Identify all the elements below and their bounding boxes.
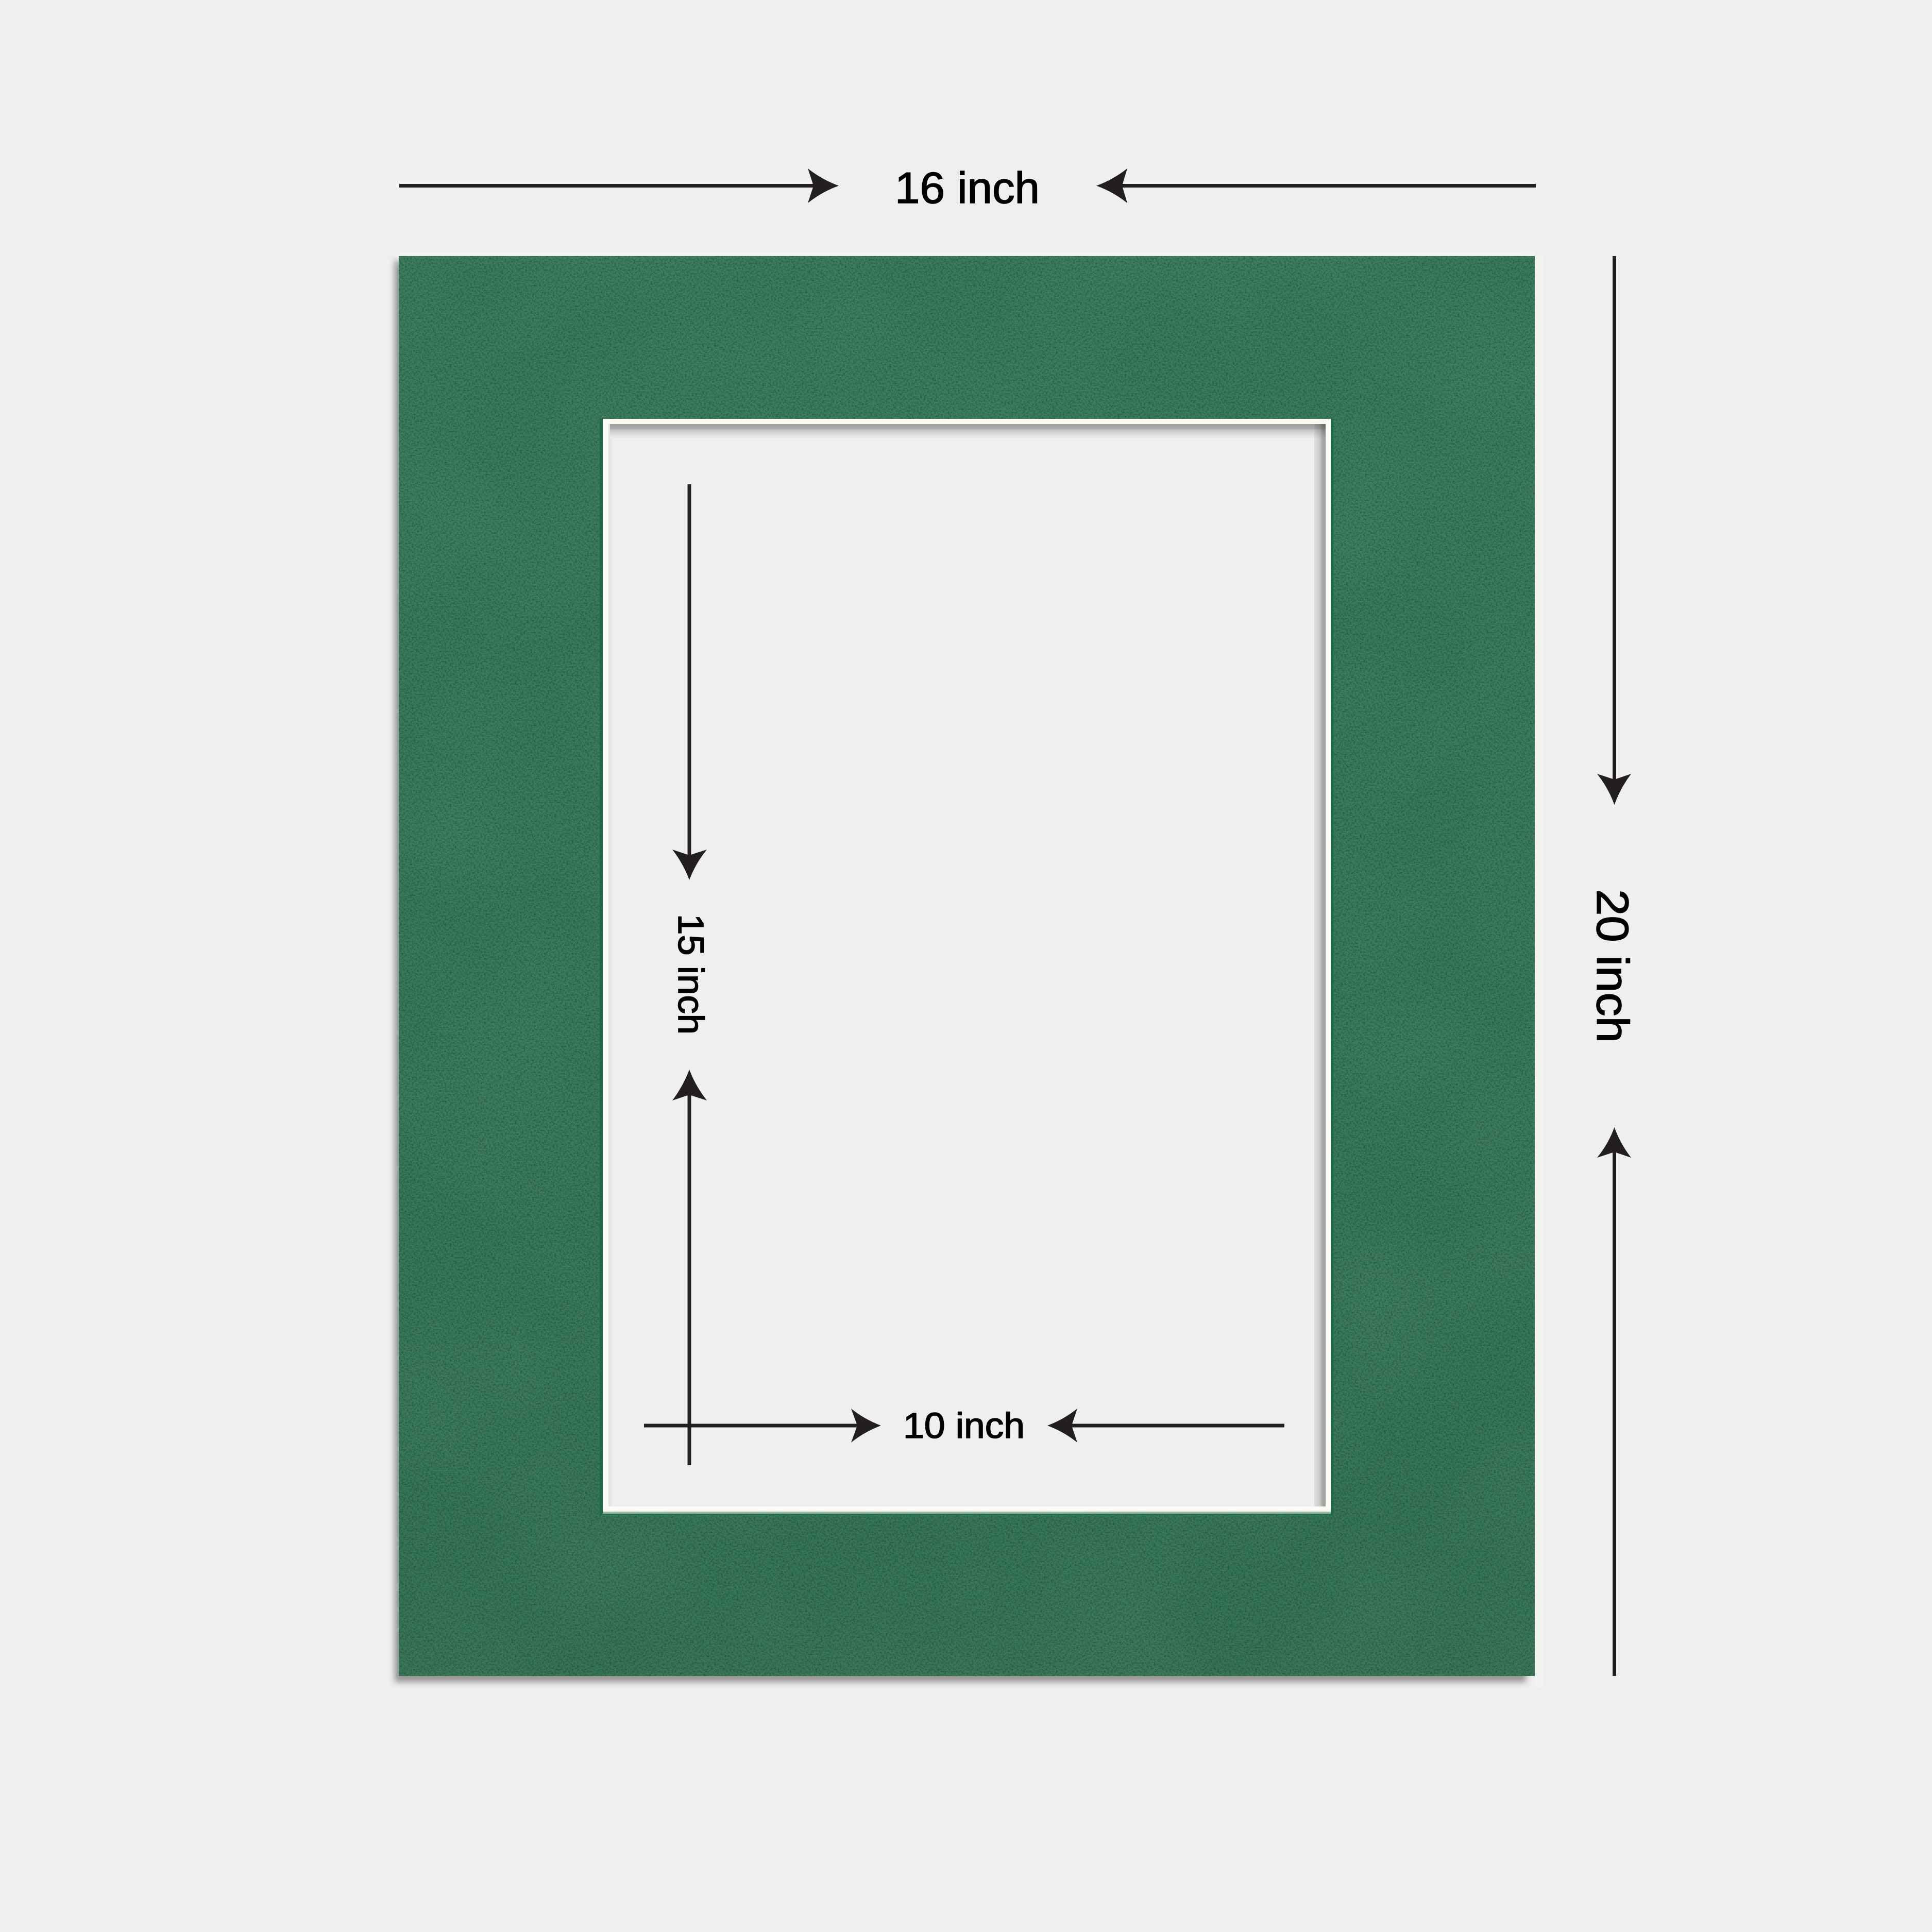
arrow: left-pointing to 10 inch label (1047, 1409, 1284, 1443)
mat soft blotches (399, 256, 1535, 1676)
arrow: downward to 15 inch label (672, 484, 707, 880)
arrow: left-pointing to 16 inch label (1096, 168, 1536, 203)
panel: mat window opening (600, 419, 1333, 1515)
label: 20 inch: 20 inch (1587, 889, 1637, 1043)
arrow: right-pointing to 16 inch label (399, 168, 839, 203)
window interior (608, 424, 1326, 1506)
interior left shadow (608, 424, 614, 1506)
mat paper grain (399, 256, 1535, 1676)
dimension: opening width 10 inch (644, 1405, 1284, 1446)
interior top shadow (610, 424, 1326, 438)
dimension: outer height 20 inch (1587, 256, 1637, 1676)
label: 15 inch: 15 inch (671, 914, 711, 1035)
interior right shadow (1314, 424, 1326, 1506)
arrow: right-pointing to 10 inch label (644, 1409, 881, 1443)
dimension: opening height 15 inch (671, 484, 711, 1465)
label: 10 inch: 10 inch (903, 1405, 1025, 1446)
mat edge glow (399, 252, 1544, 1687)
white bevel core (603, 419, 1331, 1512)
bevel lower highlight (603, 1507, 1331, 1514)
dimension: outer width 16 inch (399, 164, 1536, 213)
bevel dark edge (600, 419, 1333, 1515)
arrow: downward to 20 inch label (1597, 256, 1631, 805)
panel: green mat board (395, 252, 1544, 1687)
arrow: upward to 20 inch label (1597, 1127, 1631, 1676)
mat surface (399, 256, 1535, 1676)
mat drop shadow (395, 261, 1526, 1682)
arrow: upward to 15 inch label (672, 1070, 707, 1465)
label: 16 inch: 16 inch (895, 164, 1040, 213)
